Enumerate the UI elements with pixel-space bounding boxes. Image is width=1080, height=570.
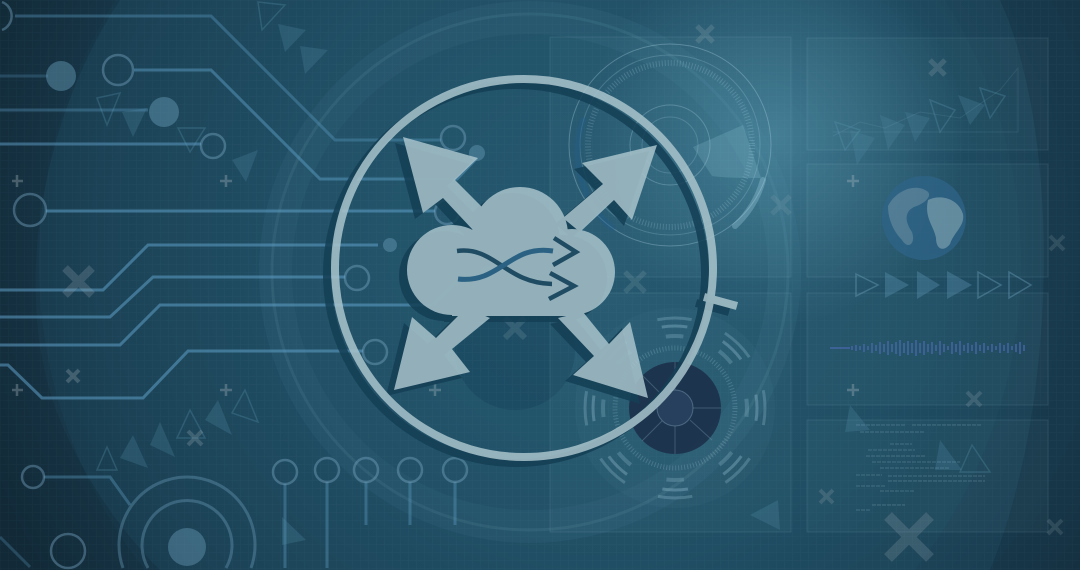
- globe icon: [882, 176, 966, 260]
- light glow behind upper dial: [560, 0, 970, 330]
- emblem: cloud with four arrows in a circle: [327, 79, 737, 463]
- code lines: [856, 425, 985, 510]
- lower dial: [575, 308, 775, 508]
- dial dark core: [629, 362, 721, 454]
- emblem shadow: [327, 85, 729, 463]
- line chart outline in top right panel: [833, 68, 1018, 136]
- screen panels: [550, 37, 1048, 532]
- circuit traces: [0, 16, 477, 568]
- audio waveform: [830, 340, 1024, 356]
- target circle bottom left: [119, 477, 255, 568]
- shuffle icon: [457, 238, 576, 299]
- dial wedge: [693, 125, 761, 178]
- plus marks: [12, 175, 859, 396]
- upper dial: [569, 44, 771, 246]
- row of arrow triangles: [856, 271, 1031, 299]
- circuit nodes: [2, 2, 495, 568]
- emblem body: [335, 79, 737, 457]
